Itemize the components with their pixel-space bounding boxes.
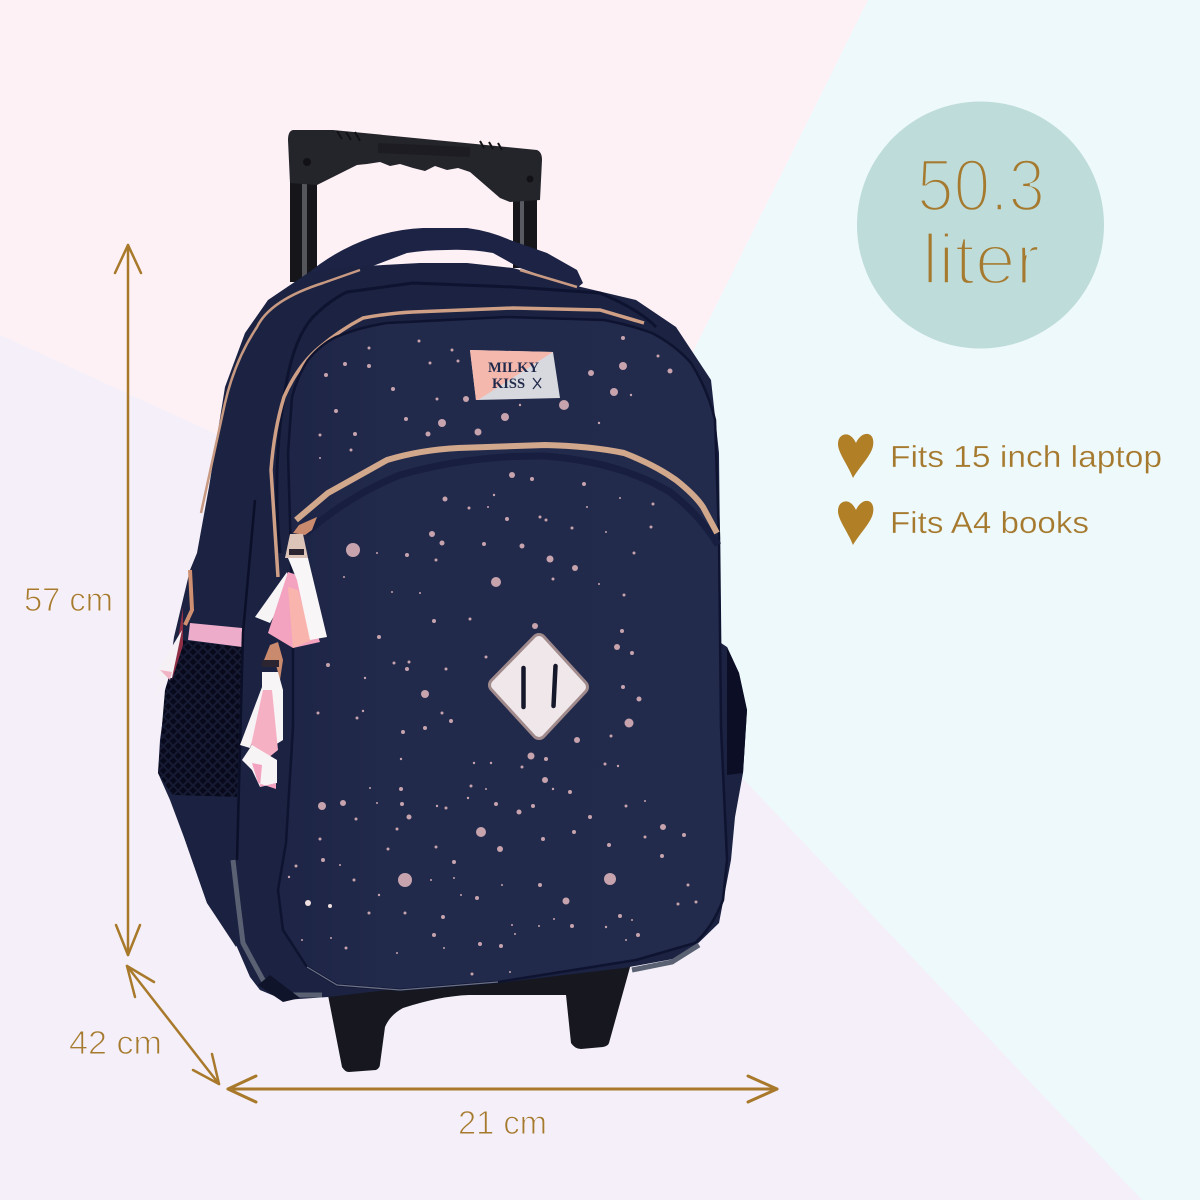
second rose gold zipper	[271, 308, 644, 577]
upper zip pull and tassel	[255, 517, 327, 648]
text: fits laptop: Fits 15 inch laptop	[890, 439, 1162, 474]
lower side pocket left	[172, 795, 237, 947]
bag body silhouette	[158, 263, 747, 1000]
icon: heart	[838, 434, 873, 478]
label: 21 cm: 21 cm	[458, 1104, 547, 1141]
outer rose gold zipper	[201, 270, 577, 513]
lower panel shine	[307, 967, 498, 990]
lower zip pull and tassel	[240, 642, 283, 789]
background: pink region	[0, 0, 868, 597]
side zip and tassel	[154, 570, 192, 697]
side mesh pocket left	[158, 640, 242, 797]
text: fits books: Fits A4 books	[890, 505, 1089, 540]
front panel	[278, 317, 727, 990]
label: 57 cm: 57 cm	[24, 581, 113, 618]
backpack illustration	[154, 130, 747, 1072]
dark bump under zipper	[258, 975, 300, 1002]
capacity value: 50.3	[917, 144, 1045, 227]
trolley handle	[288, 130, 542, 202]
Milky Kiss label: MILKY	[488, 360, 539, 376]
pink pocket band	[188, 623, 242, 647]
badge circle	[857, 102, 1104, 348]
feature: books	[838, 501, 1089, 545]
label: 42 cm: 42 cm	[69, 1024, 162, 1061]
icon: heart	[838, 501, 873, 545]
glitter diamond patch	[496, 641, 581, 732]
grey bottom zipper	[233, 860, 699, 995]
pocket navy band	[306, 456, 718, 545]
dark piping	[277, 283, 656, 553]
background: lilac region	[0, 335, 1142, 1200]
feature: laptop	[838, 434, 1162, 478]
Milky Kiss label: KISS	[492, 376, 525, 392]
Milky Kiss label	[470, 350, 560, 400]
side panel seam	[237, 500, 255, 860]
telescopic trolley poles	[290, 180, 537, 282]
side mesh pocket right	[727, 647, 747, 775]
capacity unit: liter	[922, 221, 1040, 300]
capacity badge	[857, 102, 1104, 348]
arrow: height 57 cm	[115, 245, 141, 955]
carry handle	[306, 228, 583, 288]
wheel frame	[326, 960, 632, 1072]
confetti dots	[288, 336, 698, 976]
pocket rose gold zipper	[296, 445, 717, 533]
arrow: width 21 cm	[228, 1076, 777, 1102]
arrow: depth 42 cm	[127, 966, 219, 1084]
